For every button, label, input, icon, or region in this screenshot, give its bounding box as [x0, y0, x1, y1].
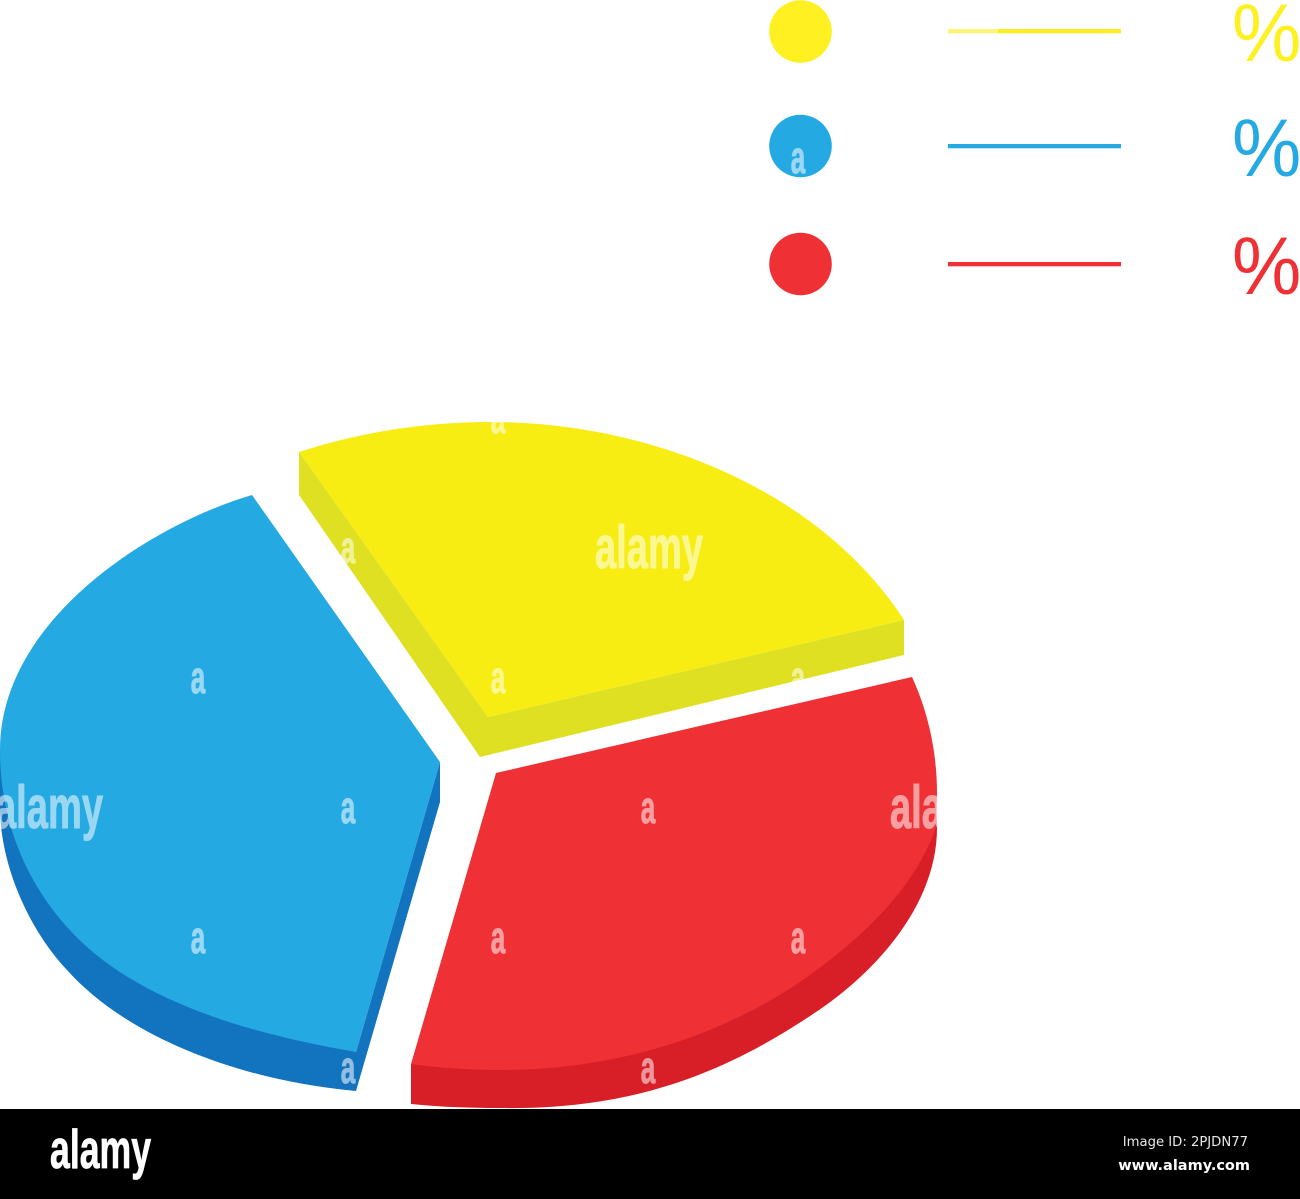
watermark: a: [341, 523, 356, 573]
watermark: a: [491, 913, 506, 963]
watermark: a: [791, 653, 806, 703]
watermark: alamy: [595, 514, 703, 581]
watermark: a: [491, 393, 506, 443]
legend row: blue: %: [1232, 102, 1300, 193]
watermark: a: [491, 653, 506, 703]
watermark: a: [791, 913, 806, 963]
watermark: a: [341, 1043, 356, 1093]
3D pie chart: [0, 422, 937, 1108]
legend row: red: %: [1232, 220, 1300, 311]
website: www.alamy.com: [1118, 1158, 1250, 1174]
watermark: a: [191, 913, 206, 963]
slice: red: [411, 677, 937, 1108]
watermark: a: [791, 133, 806, 183]
watermark: a: [641, 1043, 656, 1093]
legend: [769, 0, 1300, 311]
watermark: [0, 133, 998, 1093]
legend row: red: [769, 220, 1300, 311]
slice: yellow: [299, 422, 904, 757]
legend row: yellow: [769, 0, 1300, 78]
legend row: blue: [769, 102, 1300, 193]
slice: blue: [0, 495, 440, 1091]
watermark: a: [641, 783, 656, 833]
watermark: alamy: [890, 774, 998, 841]
watermark: a: [341, 783, 356, 833]
image id: Image ID: 2PJDN77: [1123, 1135, 1248, 1150]
watermark: a: [191, 653, 206, 703]
footer bar: [0, 1109, 1300, 1199]
footer logo: alamy: [50, 1118, 151, 1180]
